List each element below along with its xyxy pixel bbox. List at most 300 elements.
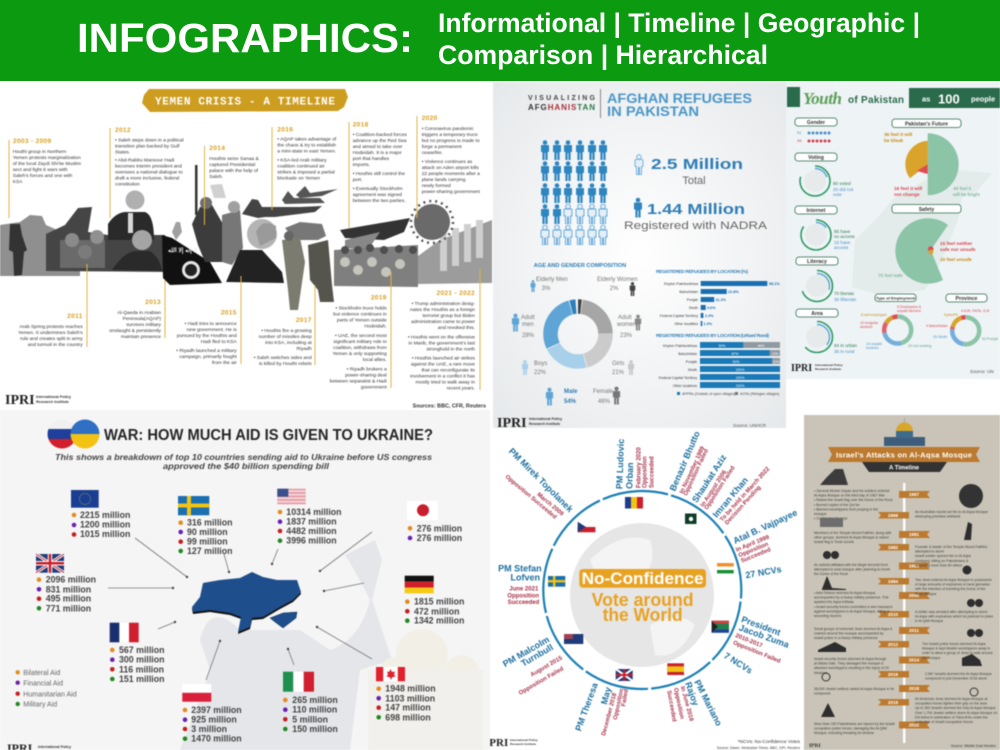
event: 2020: triggers a temporary truce	[422, 132, 478, 138]
event: 2012: 2012	[115, 127, 131, 134]
stat: gender: Gender	[807, 120, 825, 126]
event: 2016: • AQAP takes advantage of	[277, 137, 337, 143]
stat: area ring: 64 in urban	[834, 343, 857, 348]
country: Sweden: 99 million	[187, 537, 228, 547]
chart: safety pie: Safety	[919, 207, 934, 213]
source strip: International Policy	[529, 417, 562, 421]
event: 2016	[277, 127, 337, 182]
header banner	[0, 0, 1000, 81]
chart: Pakistan's future pie: 36 feel it will	[884, 132, 912, 138]
right entries	[915, 510, 997, 724]
footer: International Policy	[510, 738, 538, 742]
label: India 27 NCVs: 27 NCVs	[745, 564, 782, 580]
left entries: Israeli security forces stormed Al-Aqsa through	[814, 657, 886, 661]
footer: logo and sources	[5, 393, 486, 409]
country: Canada: 1948 million	[385, 684, 436, 694]
chart: safety pie	[878, 204, 976, 284]
stat: internet ring: no access	[834, 234, 855, 239]
centre title: No-Confidence	[582, 569, 704, 588]
left entries: roamed around the mosque accompanied by	[814, 632, 884, 636]
left entries: compound	[814, 692, 830, 696]
title ribbon: Israel's Attacks on Al-Aqsa Mosque	[836, 450, 972, 460]
year labels: 2018	[909, 686, 920, 691]
event: 2020: • Violence continues as	[422, 159, 473, 165]
chart: safety pie: safe nor unsafe	[940, 247, 976, 253]
footer: International Policy	[815, 363, 843, 367]
country: USA: 4482 million	[286, 526, 337, 536]
event: 2018: Hodeidah. It is a major	[353, 150, 402, 156]
country: France: 300 million	[119, 655, 164, 665]
label: Imran Khan: Imran Khan	[711, 475, 750, 520]
stat: internet ring: Internet	[806, 208, 826, 214]
chart: province donut: 4 AJK, FATA, G-B	[961, 309, 990, 313]
event: 2015: pursued by the Houthis and	[177, 333, 237, 339]
donut labels: Male	[564, 389, 578, 395]
subtitle: approved the $40 billion spending bill	[163, 462, 330, 471]
stat: internet ring: 15 have	[834, 240, 851, 245]
right entries: the mosque	[922, 656, 940, 660]
donut labels: Elderly Men	[536, 277, 568, 283]
year labels: 1967	[909, 492, 920, 497]
right entries: compound in just December 2016 alone	[925, 677, 987, 681]
donut labels: Adult	[618, 315, 632, 321]
label: Benazir Bhutto: In November 1989	[679, 445, 706, 495]
label: Mariano Rajoy: PM Mariano	[692, 678, 724, 728]
country: Sweden: 127 million	[187, 546, 232, 556]
label: Ludovic Orban	[614, 439, 655, 489]
title: AFGHAN REFUGEES	[607, 91, 752, 106]
label: Stefan Lofven	[498, 564, 542, 606]
event: 2015	[176, 309, 237, 366]
country: Sweden: 90 million	[187, 527, 228, 537]
chart: registered refugees by location urban rural: Punjab	[686, 360, 697, 364]
event: 2003-2009: 2003 - 2009	[13, 138, 52, 145]
left entries: • Israeli security forces committed a new massacre	[814, 605, 893, 609]
event: 2013: Peninsula(AQAP)	[123, 316, 161, 322]
chart: registered refugees by location percent: Punjab	[687, 298, 698, 302]
right entries: Mosque & kept Muslim worshippers away in	[922, 647, 990, 651]
main heading: INFOGRAPHICS:	[77, 15, 413, 61]
event: 2021-2022: nates the Houthis as a foreign	[410, 307, 475, 313]
right entries: The Israeli police forces stormed Al-Aqsa	[922, 642, 986, 646]
Visualizing Afghanistan logo	[528, 95, 596, 112]
title ribbon	[828, 447, 980, 462]
country: Italy	[283, 672, 338, 734]
chart: safety pie: 10 feel unsafe	[940, 257, 972, 263]
chart: registered refugees by location percent: Federal Capital Territory	[660, 314, 698, 318]
pictogram grid of people	[541, 140, 607, 245]
chart: registered refugees by location percent: 1.4%	[704, 322, 713, 326]
chart: registered refugees by location urban rural: 13%	[772, 352, 778, 356]
stat: gender: 49	[797, 138, 802, 143]
left entries: Al-Aqsa Mosque on the third day of 1967 War	[814, 494, 886, 498]
footer: IPRI	[809, 743, 821, 749]
event: 2012: • Abd-Rabbu Mansour Hadi	[115, 158, 174, 164]
legend	[16, 670, 77, 709]
event: 2021-2022: terrorist group but Biden	[423, 313, 475, 319]
country: Germany	[405, 576, 464, 626]
panel: Afghan refugees in Pakistan	[493, 82, 786, 431]
event: 2013	[109, 299, 162, 340]
donut labels: 3%	[542, 286, 551, 292]
event: 2018: 2018	[353, 121, 369, 128]
event: 2021-2022: • Trump administration desig-	[412, 301, 475, 307]
stat: gender: 51	[797, 130, 802, 135]
right entries: courtyard, killing an Palestinians &	[915, 559, 969, 563]
right entries: Rock Mosque	[915, 592, 936, 596]
source strip: IPRI	[497, 416, 527, 431]
right entries: occupation forces lighten their grip on the area	[915, 702, 987, 706]
footer: logo and sources: Sources: BBC, CFR, Reuters	[413, 403, 486, 409]
source strip	[497, 416, 767, 431]
chart: type of employment donut	[860, 294, 931, 350]
event: 2015: campaign, primarily fought	[179, 354, 237, 360]
chart: registered refugees by location percent: Other localities	[674, 322, 698, 326]
year labels: 2010	[888, 612, 899, 617]
event: 2018: advance up the Red Sea	[353, 138, 407, 144]
left entries: Small groups of extremist Jews stormed Al-Aqsa &	[814, 627, 893, 631]
chart: age and gender donut	[512, 263, 641, 406]
label: Imran Khan: Decision Pending	[724, 485, 763, 526]
chart: province donut	[926, 294, 998, 344]
event: 2015: from the air	[212, 360, 237, 366]
country: EU: 1015 million	[80, 529, 130, 539]
left entries: attempted to seal mosque after planning to bomb	[814, 568, 890, 572]
country: Italy: 110 million	[292, 705, 337, 715]
event: 2018: • Coalition-backed forces	[353, 132, 407, 138]
label: South Africa 7 NCVs: 7 NCVs	[722, 651, 754, 676]
stat: internet ring: access	[834, 245, 849, 250]
chart: registered refugees by location urban rural: 90%	[733, 360, 739, 364]
label: Mariano Rajoy: Succeeded	[665, 690, 677, 723]
year labels: 2000	[909, 593, 920, 598]
country: EU	[71, 490, 130, 539]
IPRI logo: International Policy	[38, 745, 71, 749]
infographic types: Comparison | Hierarchical	[438, 40, 768, 70]
event: 2017: number of missiles deep	[259, 334, 312, 340]
label: Atal Vajpayee: Atal B. Vajpayee	[732, 507, 799, 546]
year labels: 2014	[909, 658, 920, 662]
chart: registered refugees by location percent: 58.1%	[769, 282, 780, 286]
label: Jacob Zuma: Jacob Zuma	[738, 622, 791, 650]
label: Stefan Lofven: PM Stefan	[498, 564, 542, 574]
country: Germany: 1342 million	[414, 616, 464, 626]
event: 2017: • Houthis fire a growing	[261, 328, 312, 334]
event: 2021-2022: mostly tried to walk away in	[415, 379, 475, 385]
stat: literacy ring: 30 illiterate	[834, 297, 857, 302]
event: 2018: • Eventually Stockholm	[353, 186, 403, 192]
infographic types: Informational | Timeline | Geographic |	[438, 8, 920, 38]
left entries: sparked the Aqsa Intifada.	[814, 600, 854, 604]
label: Mirek Topolanek: Opposition Succeeded	[504, 474, 558, 521]
chart: registered refugees by location urban rural: 87%	[732, 352, 738, 356]
chart: safety pie: 75 feel safe	[878, 273, 903, 279]
country: France: 151 million	[119, 674, 164, 684]
country: Canada: 147 million	[385, 703, 431, 713]
subtitle band: A Timeline	[889, 466, 920, 472]
country: Canada: 1103 million	[385, 693, 435, 703]
country: UK: 2096 million	[46, 575, 96, 585]
country: UK	[36, 554, 96, 613]
donut labels	[521, 277, 638, 405]
title: IN PAKISTAN	[607, 104, 699, 119]
legend: APPRs (Outside of open villages)	[682, 392, 735, 396]
label: Stefan Lofven: Succeeded	[508, 600, 540, 606]
panel: no-confidence vote around the world	[485, 428, 804, 750]
label: Malcolm Turnbull	[501, 634, 565, 697]
country: France: 116 million	[119, 664, 164, 674]
header: people	[971, 94, 995, 104]
chart: safety pie: 15 feel neither	[940, 241, 972, 247]
chart: Pakistan's future pie	[884, 119, 980, 198]
arrows	[108, 532, 372, 680]
left entries: Israeli police in a heavy military presence	[814, 636, 878, 640]
right entries: Two Jews entered Al-Aqsa Mosque in possession	[915, 578, 992, 582]
event: 2011: rule and creates split in army	[20, 336, 83, 342]
year labels	[888, 492, 920, 728]
right entries: with the intention of bombing the Dome of the	[915, 587, 985, 591]
subtitle band	[862, 462, 947, 472]
event: 2003-2009: Houthi group in Northern	[13, 149, 67, 155]
country: EU: 1200 million	[80, 520, 130, 530]
source strip: Source: UNHCR	[733, 423, 767, 428]
event: 2019: Hodeidah.	[364, 323, 387, 329]
left entries: occupation police forces, damaging the Al-Qibli	[814, 727, 887, 731]
left entries: other groups, stormed Al-Aqsa Mosque & raised	[814, 536, 889, 540]
event: 2018: imports.	[353, 162, 370, 168]
Ukraine map	[192, 572, 301, 634]
header: 100	[938, 92, 960, 106]
footer: logo and sources: IPRI	[5, 393, 35, 408]
chart: Pakistan's future pie: be bleak	[884, 138, 904, 144]
event: 2019: significant military role in	[333, 339, 387, 345]
event: 2012: becomes interim president and	[115, 164, 182, 170]
stat: total	[635, 155, 743, 187]
country: USA: 10314 million	[286, 507, 342, 517]
chart: registered refugees by location urban rural: Balochistan	[678, 352, 697, 356]
event: 2014: captured Presidential	[209, 162, 255, 168]
right entries: A settler was arrested after attempting to storm	[915, 610, 988, 614]
centre title	[579, 569, 706, 625]
left entries: • Burned copies of the Qur'an	[814, 503, 860, 507]
event: 2019: 2019	[371, 295, 387, 302]
right entries: destroying priceless artefacts	[915, 515, 961, 519]
chart: registered refugees by location percent: 11.2%	[716, 298, 727, 302]
label: Theresa May	[573, 681, 630, 737]
event: 2019: • Riyadh brokers a	[347, 367, 387, 373]
event: 2018	[353, 121, 407, 204]
right entries: Eid Adha in celebration of Tisha B'Av under the	[915, 715, 988, 719]
footer	[809, 743, 997, 749]
timeline spine	[903, 483, 905, 743]
left entries: Mosque, including breaking its window	[814, 731, 874, 735]
chart: registered refugees by location urban rural: 100%	[736, 376, 744, 380]
map silhouette of Pakistan	[852, 170, 992, 295]
label: Atal Vajpayee: Opposition	[738, 542, 770, 559]
event: 2003-2009: Yemen protests marginalization	[13, 155, 81, 161]
event: 2020: 2020	[422, 115, 438, 122]
event: 2015: • Hadi tries to announce	[185, 321, 237, 327]
event: 2021-2022: • Houthis went on the offensive	[408, 335, 475, 341]
Visualizing Afghanistan logo: AFGHANISTAN	[528, 103, 595, 112]
left entries: wounding dozens	[814, 614, 841, 618]
footer: Source: Dawn, Hindustan Times, BBC, DPI, Reuters	[717, 746, 800, 750]
event: 2017: 2017	[296, 317, 312, 324]
country: Poland	[182, 684, 242, 744]
label: Ludovic Orban: February 2020	[637, 447, 643, 488]
stat: voting ring: vote	[833, 192, 842, 197]
stat: total: 2.5 Million	[651, 156, 743, 173]
chart: registered refugees by location urban rural: Khyber Pakhtunkhwa	[663, 344, 697, 348]
IPRI logo	[7, 741, 71, 750]
donut labels: 46%	[598, 399, 611, 405]
footer: logo and sources: International Policy	[36, 395, 72, 399]
chart: Pakistan's future pie: 48 feel it	[953, 186, 972, 192]
stat: voting ring: 20 did not	[833, 187, 854, 192]
subtitle: This shows a breakdown of top 10 countries sending aid to Ukraine before US congress	[55, 453, 432, 462]
right entries: protection of Israeli occupation forces	[915, 720, 973, 724]
label: Ludovic Orban: Opposition	[643, 456, 649, 488]
right entries: An Australian tourist set fire to Al-Aqsa Mosque	[915, 510, 988, 514]
country: Poland: 2397 million	[191, 705, 242, 715]
country: Italy: 5 million	[292, 714, 328, 724]
chart: registered refugees by location percent: Sindh	[689, 306, 698, 310]
donut labels: 2%	[610, 286, 619, 292]
event: 2019: but violence continues in	[333, 311, 387, 317]
event: 2011: Arab Spring protests reaches	[19, 324, 83, 330]
country: Japan: 276 million	[417, 523, 462, 533]
label: Stefan Lofven: Lofven	[510, 573, 540, 583]
icons	[818, 469, 983, 717]
year ribbons	[878, 491, 930, 728]
chart: registered refugees by location urban rural: Other locations	[673, 384, 697, 388]
country: Japan	[407, 501, 462, 543]
event: 2020: ceasefire.	[422, 150, 443, 156]
label: Atal Vajpayee: Succeeded	[740, 547, 772, 565]
title: WAR: HOW MUCH AID IS GIVEN TO UKRAINE?	[104, 427, 433, 444]
donut labels: Boys	[534, 361, 547, 367]
event: 2019: local allies.	[363, 357, 387, 363]
left entries: • Ariel Sharon stormed Al-Aqsa Mosque	[814, 591, 875, 595]
chart: registered refugees by location percent: Khyber Pakhtunkhwa	[664, 282, 698, 286]
event: 2014: Saleh.	[209, 174, 223, 180]
donut labels: 54%	[564, 399, 577, 405]
stat: literacy ring: 70 literate	[834, 291, 855, 296]
label: Mariano Rajoy: Rajoy	[683, 681, 701, 707]
label: Theresa May: Failed	[621, 689, 630, 707]
label: Mariano Rajoy	[665, 678, 724, 728]
chart: province donut: KyberPK	[944, 313, 959, 317]
title	[607, 91, 752, 119]
label: Ludovic Orban: Orban	[624, 462, 635, 489]
chart: registered refugees by location urban rural: 54%	[719, 344, 725, 348]
label: Mariano Rajoy: Opposition	[672, 687, 685, 720]
chart: type of employment donut: 10 irregular	[860, 321, 879, 325]
event: 2019: • Stockholm truce holds	[336, 305, 387, 311]
label: Malcolm Turnbull: Opposition Failed	[518, 666, 565, 697]
photo strip collage	[0, 165, 492, 310]
event: 2020: plane lands carrying	[422, 177, 466, 183]
event: 2018: port.	[353, 177, 362, 183]
event: 2018: • Houthis still control the	[353, 171, 405, 177]
label: Jacob Zuma: 2010-2017	[734, 633, 764, 650]
right entries: Israeli soldier opened fire in Al-Aqsa	[915, 554, 971, 558]
country: France: 567 million	[119, 645, 164, 655]
chart: province donut: 53 Punjab	[982, 337, 998, 341]
country: UK: 495 million	[46, 594, 91, 604]
stat: registered: 1.44 Million	[647, 201, 745, 218]
Russia and Ukraine flag badges	[47, 419, 100, 449]
event: 2013: Al-Qaeda in Arabian	[117, 310, 161, 316]
year labels: 1982	[888, 545, 899, 550]
footer	[485, 737, 801, 750]
donut labels: 23%	[620, 333, 633, 339]
right entries: in Al-Qibli Mosque	[915, 619, 943, 623]
event: 2019: Yemen & only supporting	[332, 351, 387, 357]
event: 2003-2009: sect and fight 6 wars with	[13, 167, 68, 173]
event: 2014	[209, 145, 260, 180]
event: 2013: onslaught & persistently	[109, 328, 162, 334]
left entries: the Dome of the Rock	[814, 572, 848, 576]
left entries: Israeli flag & Torah scrolls	[814, 540, 854, 544]
chart: registered refugees by location percent: REGISTERED REFUGEES BY LOCATION (%)	[656, 269, 748, 275]
country: Poland: 1470 million	[191, 734, 242, 744]
left entries: al-Silsila Gate. They damaged the mosque &	[814, 662, 884, 666]
event: 2016: • KSA-led Arab military	[277, 158, 327, 164]
right entries: Up to 300 Israelis stormed the holy Al-Aqsa Mosque	[915, 706, 996, 710]
chart: Pakistan's future pie: will be bright	[953, 192, 980, 198]
chart: registered refugees by location urban rural: 10%	[773, 360, 779, 364]
right entries: 60 American Jews stormed Al-Aqsa Mosque at	[915, 697, 987, 701]
left entries: • Banned worshippers from praying in the	[814, 507, 878, 511]
chart: registered refugees by location percent: 2.4%	[705, 314, 714, 318]
country: Canada	[376, 667, 436, 722]
event: 2017: Riyadh	[296, 346, 312, 352]
event: 2019: government	[361, 385, 387, 391]
label: Shaukat Aziz: Opposition Failed	[704, 465, 737, 511]
panel: Youth of Pakistan	[786, 82, 1000, 379]
subtitle	[55, 453, 432, 471]
left entries: An activist affiliated with the Begin terrorist front	[814, 563, 888, 567]
label: Theresa May: December 2018	[601, 692, 618, 737]
chart: province donut: Province	[956, 296, 978, 302]
country: France	[110, 623, 164, 684]
chart: registered refugees by location percent	[656, 269, 780, 326]
panel: Yemen crisis timeline	[0, 82, 492, 410]
ring	[543, 491, 741, 689]
right entries: attempted to storm	[915, 550, 944, 554]
event: 2012: States.	[115, 150, 130, 156]
stat: literacy ring: Literacy	[807, 259, 827, 265]
left entries: Members of the Temple Mount Faithful, along with	[814, 531, 891, 535]
event: 2012	[115, 127, 184, 188]
event: 2011: Yemen. It undermines Saleh's	[18, 330, 83, 336]
chart: type of employment donut: 6 Employees &	[897, 305, 922, 309]
chart: registered refugees by location urban rural: Federal Capital Territory	[659, 376, 697, 380]
event: 2017: • Saleh switches sides and	[254, 355, 312, 361]
stat: area ring: 36 in rural	[834, 349, 854, 354]
right entries: Over 1,700 Jewish settlers storm Al-Aqsa Mosque on	[915, 711, 997, 715]
chart: province donut: 25 Sindh	[933, 335, 947, 339]
event: 2014: palace with the help of	[209, 168, 259, 174]
footer: logo and sources: Research Institute	[36, 400, 69, 404]
country: Japan: 276 million	[417, 533, 462, 543]
title banner: YEMEN CRISIS - A TIMELINE	[155, 96, 335, 108]
legend: ACRs (Refugee villages)	[740, 392, 779, 396]
label: Ludovic Orban: Succeeded	[649, 456, 655, 488]
event: 2021-2022	[408, 290, 476, 391]
label: Theresa May: May	[599, 686, 613, 706]
